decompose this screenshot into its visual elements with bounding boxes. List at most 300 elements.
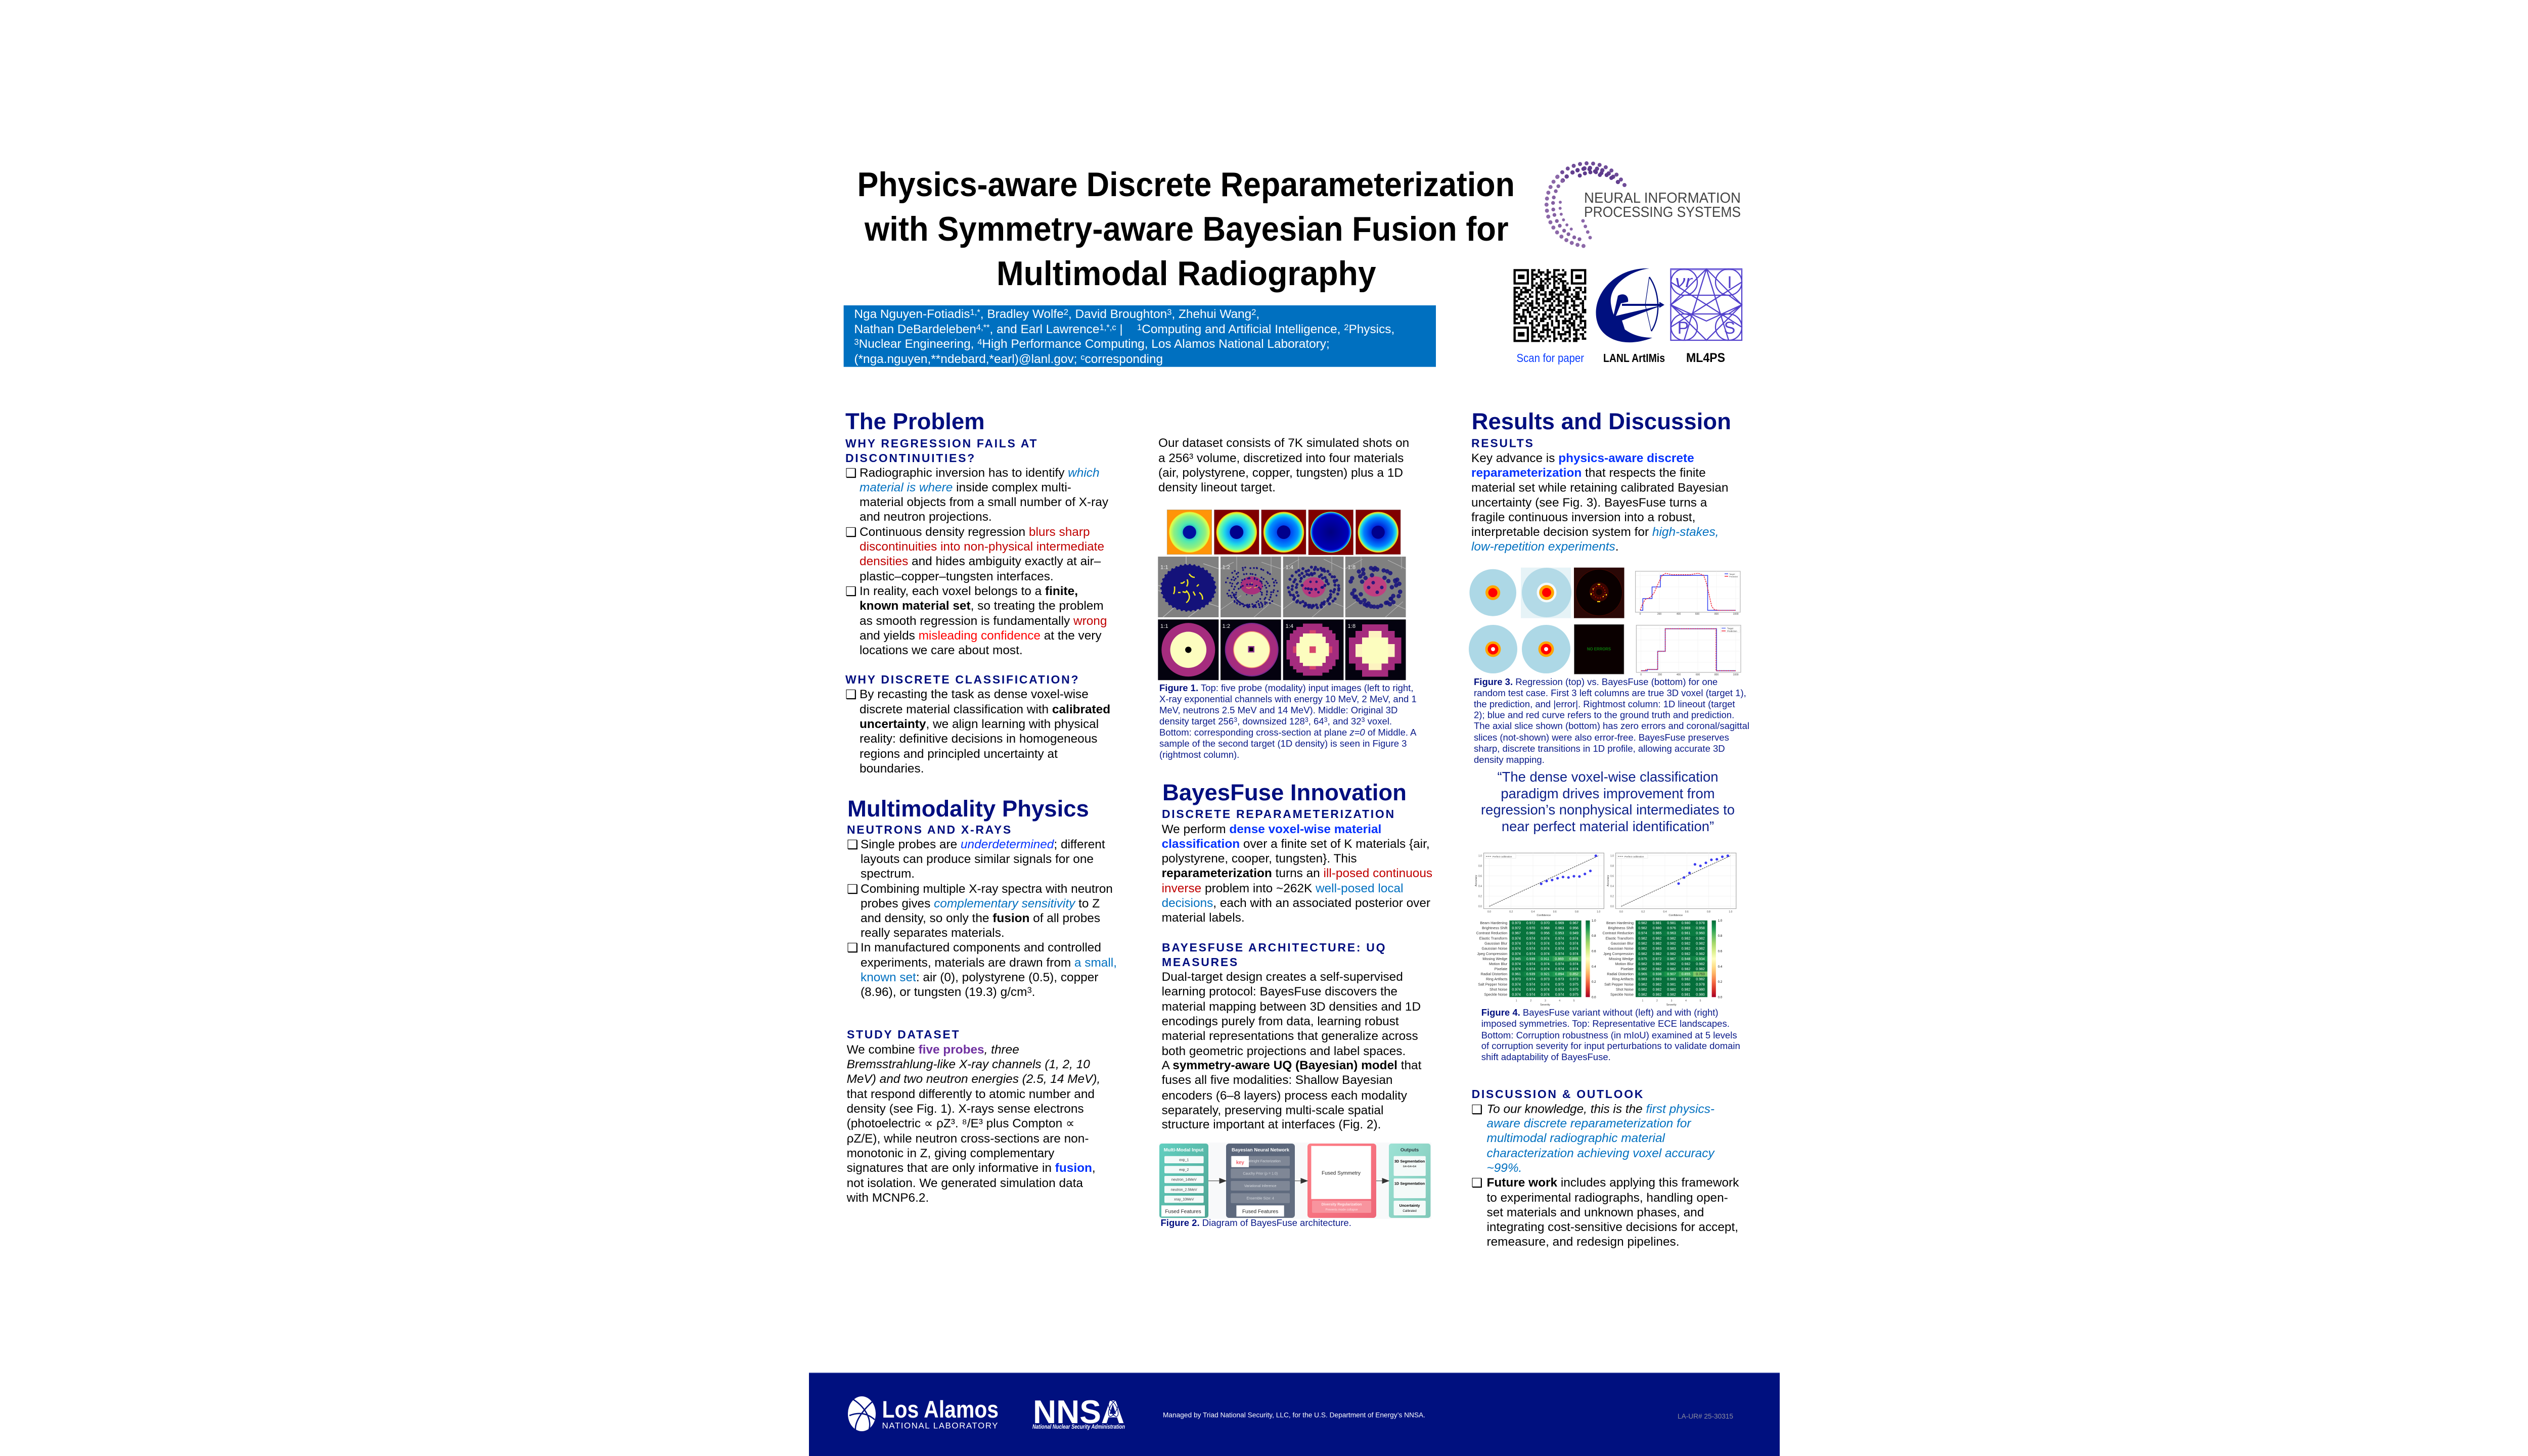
logo: ML4PS — [1671, 269, 1742, 340]
chart: calibration without symmetry: Perfect calibration — [1493, 855, 1512, 858]
heatmap: corruption robustness without symmetry: Elastic Transform — [1479, 936, 1507, 940]
heatmap: corruption robustness with symmetry: Pixelate — [1620, 967, 1634, 971]
figure 3 regression lineout: 800 — [1714, 613, 1719, 616]
heatmap: corruption robustness without symmetry: 0.974 0.974 0.974 0.974 0.974 — [1512, 952, 1578, 956]
text: discrete reparameterization: decisions, each with an associated posterior over — [1162, 896, 1430, 910]
figure 1 caption — [1159, 682, 1417, 760]
chart: calibration with symmetry: 1.0 — [1610, 854, 1614, 857]
block: multi-modal input — [1159, 1144, 1208, 1218]
text: study dataset paragraph — [846, 1043, 1100, 1205]
heatmap: corruption robustness without symmetry: 0.0 — [1592, 996, 1596, 999]
arrow: symmetry to outputs — [1376, 1178, 1389, 1184]
heatmap: corruption robustness without symmetry: Gaussian Blur — [1484, 941, 1508, 945]
figure 3 regression lineout: 0 — [1640, 613, 1641, 616]
panel: BayesFuse Innovation — [1162, 780, 1432, 1131]
figure 1 bottom row: cross-sections: 1:2 — [1223, 623, 1230, 629]
author and affiliation banner: Nathan DeBardeleben4,**, and Earl Lawrence1,*,c | — [854, 323, 1123, 336]
figure 1 middle row: 3D density targets: 1:2 — [1223, 565, 1230, 571]
figure 3 BayesFuse lineout: 1000 — [1733, 673, 1739, 676]
bullets: regression problems: Continuous density regression blurs sharp — [860, 525, 1090, 539]
chart: calibration without symmetry: Accuracy — [1475, 875, 1478, 886]
heatmap: corruption robustness with symmetry: 4 — [1685, 999, 1687, 1003]
chart: calibration with symmetry: 0.2 — [1641, 911, 1645, 914]
bullets: neutrons and x-rays: Single probes are underdetermined; different — [861, 838, 1105, 851]
text: study dataset paragraph: density (see Fig. 1). X-rays sense electrons — [847, 1102, 1084, 1116]
bullets: discrete classification: discrete material classification with calibrated — [860, 703, 1110, 716]
figure 1: probes and density targets — [1158, 510, 1417, 760]
heatmap: corruption robustness without symmetry: 1 — [1516, 999, 1517, 1003]
heatmap: corruption robustness without symmetry: Motion Blur — [1489, 962, 1508, 966]
bullets: regression problems: known material set, so treating the problem — [860, 599, 1104, 613]
logo captions: LANL ArtIMis — [1603, 351, 1665, 365]
subheading: why discrete classification: WHY DISCRETE CLASSIFICATION? — [845, 673, 1079, 686]
chart: calibration without symmetry: 1.0 — [1478, 854, 1482, 857]
text: study dataset paragraph: with MCNP6.2. — [846, 1191, 929, 1205]
bullets: discrete classification — [845, 687, 1110, 776]
bullets: neutrons and x-rays: known set: air (0), polystyrene (0.5), copper — [861, 971, 1098, 984]
bullets: neutrons and x-rays: and density, so only the fusion of all probes — [861, 912, 1100, 925]
text: results paragraph: fragile continuous inversion into a robust, — [1471, 511, 1695, 524]
figure 4 caption: of corruption severity for input perturbations to validate domain — [1481, 1040, 1740, 1051]
bullets: neutrons and x-rays: experiments, materials are drawn from a small, — [861, 956, 1117, 970]
bullets: regression problems: densities and hides ambiguity exactly at air– — [860, 555, 1101, 568]
bullets: discussion and outlook: ❑ — [1471, 1102, 1482, 1117]
figure 3 BayesFuse lineout: Prediction — [1727, 630, 1737, 632]
figure 3 regression lineout: Predicted — [1729, 575, 1738, 578]
logo: NNSA: NNSA — [1033, 1393, 1124, 1430]
chart: calibration without symmetry: 1.0 — [1597, 911, 1600, 914]
bullets: discrete classification: uncertainty, we align learning with physical — [860, 717, 1099, 731]
figure 1 caption: MeV, neutrons 2.5 MeV and 14 MeV). Middle: Original 3D — [1159, 705, 1397, 715]
chart: calibration with symmetry: 1.0 — [1729, 911, 1732, 914]
bullets: discussion and outlook — [1471, 1102, 1739, 1249]
text: discrete reparameterization: inverse problem into ~262K well-posed local — [1162, 882, 1404, 895]
figure 3 BayesFuse lineout: Target — [1727, 627, 1734, 630]
text: BayesFuse architecture: encoders (6–8 layers) process each modality — [1162, 1089, 1408, 1103]
bullets: regression problems: locations we care about most. — [860, 644, 1023, 657]
figure 3: regression vs BayesFuse — [1469, 568, 1749, 765]
author and affiliation banner — [844, 305, 1436, 367]
chart: calibration without symmetry — [1475, 853, 1604, 917]
text: discrete reparameterization: material labels. — [1162, 911, 1245, 925]
figure 3 regression prediction — [1521, 568, 1571, 618]
arrow: input to network — [1208, 1178, 1226, 1184]
bullets: neutrons and x-rays — [847, 837, 1117, 999]
figure 3 BayesFuse lineout: 400 — [1677, 673, 1681, 676]
figure 3 BayesFuse lineout: 600 — [1696, 673, 1700, 676]
block: multi-modal input: Fused Features — [1165, 1209, 1201, 1214]
figure 2 caption: Figure 2. Diagram of BayesFuse architecture. — [1161, 1217, 1351, 1228]
block: fused symmetry: Diversity Regularization — [1322, 1203, 1362, 1206]
bullets: regression problems: Radiographic inversion has to identify which — [860, 466, 1100, 480]
heatmap: corruption robustness without symmetry: 2 — [1530, 999, 1531, 1003]
bullets: discussion and outlook: ~99%. — [1486, 1161, 1522, 1175]
heatmap: corruption robustness with symmetry: 0.982 0.982 0.982 0.982 0.982 — [1638, 963, 1705, 966]
text: dataset summary — [1158, 436, 1409, 494]
bullets: regression problems: and yields misleading confidence at the very — [860, 629, 1102, 643]
heatmap: corruption robustness with symmetry: Salt Pepper Noise — [1604, 982, 1634, 987]
heatmap: corruption robustness with symmetry: 0.982 0.982 0.982 0.982 0.980 — [1638, 988, 1705, 992]
panel: Discussion and Outlook — [1471, 1087, 1739, 1249]
heatmap: corruption robustness with symmetry — [1602, 919, 1723, 1007]
heatmap: corruption robustness with symmetry: Jpeg Compression — [1603, 951, 1634, 956]
heatmap: corruption robustness with symmetry: 1 — [1642, 999, 1644, 1003]
chart: calibration with symmetry: 0.6 — [1685, 911, 1689, 914]
text: results paragraph: uncertainty (see Fig. 3). BayesFuse turns a — [1471, 496, 1707, 510]
bullets: regression problems: discontinuities into non-physical intermediate — [860, 540, 1104, 554]
heatmap: corruption robustness without symmetry: 0.974 0.974 0.974 0.974 0.974 — [1512, 937, 1578, 940]
chart: calibration without symmetry: 0.6 — [1478, 875, 1482, 878]
block: multi-modal input: neutron_14MeV — [1171, 1178, 1197, 1182]
heatmap: corruption robustness with symmetry: 0.975 0.972 0.967 0.948 0.934 — [1638, 958, 1705, 961]
heatmap: corruption robustness with symmetry: 5 — [1700, 999, 1701, 1003]
figure 1 bottom row: cross-sections — [1158, 619, 1406, 680]
text: BayesFuse architecture: A symmetry-aware UQ (Bayesian) model that — [1162, 1059, 1422, 1072]
subheading: why regression fails: WHY REGRESSION FAILS AT — [845, 437, 1038, 450]
callout: pull quote: near perfect material identification” — [1502, 818, 1714, 834]
text: BayesFuse architecture: Dual-target design creates a self-supervised — [1162, 970, 1403, 984]
title: Multimodal Radiography — [997, 254, 1376, 293]
text: discrete reparameterization: reparameterization turns an ill-posed continuous — [1162, 867, 1432, 880]
text: results paragraph: low-repetition experiments. — [1471, 540, 1618, 554]
heatmap: corruption robustness without symmetry: Radial Distortion — [1481, 972, 1507, 976]
chart: calibration with symmetry: 0.2 — [1610, 895, 1614, 898]
chart: calibration without symmetry: 0.8 — [1478, 864, 1482, 868]
block: fused symmetry: Fused Symmetry — [1322, 1171, 1361, 1176]
heatmap: corruption robustness with symmetry: 3 — [1671, 999, 1673, 1003]
logo: Los Alamos National Laboratory: NATIONAL LABORATORY — [882, 1421, 998, 1431]
block: outputs: Uncertainty — [1400, 1203, 1420, 1208]
bullets: neutrons and x-rays: ❑ — [847, 940, 858, 955]
logo: ML4PS: S — [1724, 318, 1735, 338]
chart: calibration without symmetry: 0.4 — [1531, 911, 1535, 914]
logo captions: ML4PS — [1686, 351, 1725, 365]
chart: calibration without symmetry: 0.4 — [1478, 885, 1482, 888]
text: document number: LA-UR# 25-30315 — [1678, 1412, 1733, 1420]
figure 3 caption: sharp, discrete transitions in 1D profile, allowing accurate 3D — [1474, 743, 1725, 754]
bullets: regression problems: material objects from a small number of X-ray — [860, 495, 1109, 509]
text: study dataset paragraph: We combine five probes, three — [847, 1043, 1019, 1057]
subheading: study dataset: STUDY DATASET — [847, 1028, 960, 1041]
heatmap: corruption robustness without symmetry: 0.945 0.939 0.911 0.869 0.855 — [1512, 958, 1578, 961]
bullets: neutrons and x-rays: Combining multiple X-ray spectra with neutron — [861, 882, 1113, 896]
QR code: scan for paper — [1514, 270, 1586, 341]
bullets: neutrons and x-rays: probes gives complementary sensitivity to Z — [861, 897, 1100, 911]
chart: calibration with symmetry: 0.0 — [1610, 905, 1614, 908]
bullets: regression problems: ❑ — [845, 525, 856, 539]
figure 3 BayesFuse lineout: 200 — [1658, 673, 1662, 676]
figure 3 BayesFuse error map: NO ERRORS — [1587, 647, 1611, 651]
text: results paragraph: reparameterization that respects the finite — [1471, 466, 1706, 480]
figure 3 regression lineout: 400 — [1677, 613, 1681, 616]
figure 1 caption: (rightmost column). — [1159, 749, 1239, 760]
title: with Symmetry-aware Bayesian Fusion for — [864, 210, 1509, 248]
text: BayesFuse architecture: material representations that generalize across — [1162, 1029, 1418, 1043]
heatmap: corruption robustness without symmetry: 0.974 0.974 0.974 0.974 0.975 — [1512, 993, 1578, 997]
block: Bayesian neural network — [1226, 1144, 1295, 1218]
heatmap: corruption robustness with symmetry: Gaussian Blur — [1611, 941, 1634, 945]
subheading: neutrons and x-rays: NEUTRONS AND X-RAYS — [847, 823, 1012, 836]
figure 3 BayesFuse prediction — [1522, 625, 1570, 673]
heatmap: corruption robustness without symmetry: Salt Pepper Noise — [1478, 982, 1507, 987]
footer bar — [809, 1373, 1780, 1456]
figure 4 caption — [1481, 1007, 1740, 1062]
heading: Results and Discussion: Results and Discussion — [1472, 408, 1731, 434]
figure 1 caption: X-ray exponential channels with energy 10 MeV, 2 MeV, and 1 — [1159, 694, 1417, 704]
text: BayesFuse architecture: separately, preserving multi-scale spatial — [1162, 1104, 1383, 1117]
bullets: discussion and outlook: characterization achieving voxel accuracy — [1486, 1147, 1715, 1160]
bullets: regression problems: plastic–copper–tungsten interfaces. — [860, 570, 1054, 583]
chart: calibration without symmetry: 0.0 — [1478, 905, 1482, 908]
heatmap: corruption robustness with symmetry: Shot Noise — [1616, 987, 1634, 992]
figure 1 middle row: 3D density targets: 1:1 — [1160, 565, 1168, 571]
bullets: regression problems: and neutron projections. — [860, 510, 992, 524]
figure 1 middle row: 3D density targets — [1158, 557, 1406, 617]
block: outputs — [1389, 1144, 1430, 1218]
chart: calibration without symmetry: 0.0 — [1487, 911, 1491, 914]
chart: calibration without symmetry: 0.2 — [1478, 895, 1482, 898]
heatmap: corruption robustness without symmetry: 0.973 0.972 0.970 0.969 0.967 — [1512, 922, 1578, 925]
text: results paragraph: material set while retaining calibrated Bayesian — [1471, 481, 1728, 494]
heatmap: corruption robustness with symmetry: 0.982 0.982 0.982 0.982 0.982 — [1638, 952, 1705, 956]
figure 3 regression lineout: Target — [1729, 573, 1735, 575]
heatmap: corruption robustness with symmetry: 0.982 0.982 0.982 0.982 0.982 — [1638, 937, 1705, 940]
text: BayesFuse architecture: encodings purely from data, learning robust — [1162, 1015, 1399, 1028]
figure 3 regression lineout: 200 — [1657, 613, 1661, 616]
text: results paragraph: Key advance is physics-aware discrete — [1471, 451, 1694, 465]
subheading: BayesFuse architecture: BAYESFUSE ARCHITECTURE: UQ — [1162, 941, 1386, 954]
block: fused symmetry: Prevents mode collapse — [1325, 1208, 1358, 1211]
bullets: regression problems: ❑ — [845, 466, 856, 480]
heatmap: corruption robustness with symmetry: Elastic Transform — [1605, 936, 1634, 940]
figure 3 caption — [1474, 676, 1749, 765]
bullets: discussion and outlook: multimodal radiographic material — [1486, 1131, 1665, 1145]
figure 4 caption: shift adaptability of BayesFuse. — [1481, 1052, 1611, 1062]
figure 1 bottom row: cross-sections: 1:1 — [1160, 623, 1168, 629]
block: multi-modal input: exp_2 — [1179, 1168, 1189, 1172]
arrow: network to symmetry — [1295, 1178, 1307, 1184]
chart: calibration without symmetry: 0.6 — [1553, 911, 1557, 914]
callout: pull quote: “The dense voxel-wise classification — [1498, 769, 1718, 785]
bullets: discrete classification: boundaries. — [860, 762, 924, 776]
figure 3 caption: random test case. First 3 left columns are true 3D voxel (target 1), — [1474, 688, 1746, 698]
chart: calibration with symmetry: 0.0 — [1619, 911, 1623, 914]
heatmap: corruption robustness without symmetry: 0.974 0.974 0.974 0.974 0.974 — [1512, 968, 1578, 971]
chart: calibration with symmetry: 0.4 — [1610, 885, 1614, 888]
subheading: discussion and outlook: DISCUSSION & OUTLOOK — [1472, 1087, 1644, 1101]
figure 1 middle row: 3D density targets: 1:8 — [1348, 565, 1356, 571]
logo: NeurIPS: NEURAL INFORMATION — [1584, 190, 1741, 206]
heatmap: corruption robustness without symmetry: 0.973 0.974 0.973 0.973 0.973 — [1512, 978, 1578, 981]
figure 3 caption: The axial slice shown (bottom) has zero errors and coronal/sagittal — [1474, 720, 1749, 731]
chart: calibration with symmetry — [1607, 853, 1736, 917]
block: Bayesian neural network: Weight Factorization — [1248, 1160, 1281, 1163]
bullets: neutrons and x-rays: (8.96), or tungsten (19.3) g/cm3. — [861, 985, 1035, 999]
bullets: discussion and outlook: Future work includes applying this framework — [1486, 1176, 1739, 1190]
heatmap: corruption robustness with symmetry: Gaussian Noise — [1608, 946, 1634, 950]
heatmap: corruption robustness without symmetry: Gaussian Noise — [1482, 946, 1507, 950]
heatmap: corruption robustness with symmetry: 1.0 — [1718, 919, 1723, 923]
bullets: neutrons and x-rays: really separates materials. — [861, 926, 1005, 940]
logo: ML4PS: I — [1727, 273, 1732, 292]
figure 1 bottom row: cross-sections: 1:8 — [1348, 623, 1356, 629]
heatmap: corruption robustness without symmetry: 0.4 — [1592, 965, 1596, 969]
block: Bayesian neural network: Bayesian Neural Network — [1232, 1148, 1290, 1153]
text: results paragraph: interpretable decision system for high-stakes, — [1471, 525, 1719, 539]
text: discrete reparameterization: polystyrene, cooper, tungsten}. This — [1162, 852, 1357, 866]
text: study dataset paragraph: that respond differently to atomic number and — [847, 1087, 1095, 1101]
bullets: neutrons and x-rays: spectrum. — [861, 867, 915, 881]
text: dataset summary: a 256³ volume, discretized into four materials — [1158, 451, 1404, 465]
heatmap: corruption robustness without symmetry: 0.8 — [1592, 934, 1596, 938]
text: BayesFuse architecture: material mapping between 3D densities and 1D — [1162, 1000, 1421, 1014]
figure 1 caption: sample of the second target (1D density) is seen in Figure 3 — [1159, 738, 1407, 749]
heatmap: corruption robustness with symmetry: Radial Distortion — [1607, 972, 1634, 976]
block: outputs: 1D Segmentation — [1394, 1181, 1425, 1186]
heatmap: corruption robustness with symmetry: 0.965 0.938 0.907 0.855 0.763 — [1638, 973, 1705, 976]
chart: calibration without symmetry: 0.2 — [1509, 911, 1513, 914]
heatmap: corruption robustness without symmetry: Speckle Noise — [1484, 992, 1507, 997]
heatmap: corruption robustness without symmetry: Severity — [1540, 1004, 1550, 1007]
chart: calibration with symmetry: 0.6 — [1610, 875, 1614, 878]
bullets: neutrons and x-rays: layouts can produce similar signals for one — [861, 852, 1094, 866]
figure 4 caption: Figure 4. BayesFuse variant without (left) and with (right) — [1481, 1007, 1719, 1018]
subheading: discrete reparameterization: DISCRETE REPARAMETERIZATION — [1162, 807, 1395, 821]
heatmap: corruption robustness with symmetry: 0.982 0.980 0.976 0.969 0.958 — [1638, 927, 1705, 930]
heatmap: corruption robustness with symmetry: Missing Wedge — [1609, 957, 1634, 961]
block: multi-modal input: xray_10MeV — [1174, 1198, 1194, 1202]
logo: NNSA: National Nuclear Security Administration — [1032, 1424, 1125, 1430]
heatmap: corruption robustness without symmetry: 0.2 — [1592, 980, 1596, 984]
logo: Los Alamos National Laboratory: Los Alamos — [882, 1396, 999, 1423]
figure 1 caption: density target 2563, downsized 1283, 643, and 323 voxel. — [1159, 716, 1392, 726]
block: Bayesian neural network: key — [1236, 1160, 1244, 1166]
text: management statement: Managed by Triad National Security, LLC, for the U.S. Department of Energy’s NNSA. — [1163, 1412, 1425, 1419]
heatmap: corruption robustness with symmetry: 0.0 — [1718, 996, 1723, 999]
heatmap: corruption robustness without symmetry: 4 — [1559, 999, 1560, 1003]
heatmap: corruption robustness with symmetry: 0.2 — [1718, 980, 1723, 984]
figure 4 caption: Bottom: Corruption robustness (in mIoU) examined at 5 levels — [1481, 1030, 1737, 1040]
text: BayesFuse architecture: structure important at interfaces (Fig. 2). — [1162, 1118, 1381, 1131]
heatmap: corruption robustness without symmetry: Jpeg Compression — [1477, 951, 1507, 956]
block: outputs: Outputs — [1401, 1148, 1419, 1153]
heatmap: corruption robustness without symmetry: Pixelate — [1495, 967, 1507, 971]
text: study dataset paragraph: MeV) and two neutron energies (2.5, 14 MeV), — [847, 1072, 1100, 1086]
text: dataset summary: density lineout target. — [1158, 481, 1276, 494]
panel: Multimodality Physics — [847, 796, 1117, 999]
block: Bayesian neural network: Fused Features — [1242, 1209, 1278, 1214]
heatmap: corruption robustness without symmetry: 5 — [1573, 999, 1575, 1003]
heatmap: corruption robustness without symmetry: 0.974 0.974 0.974 0.974 0.974 — [1512, 963, 1578, 966]
bullets: regression problems: ❑ — [845, 584, 856, 599]
text: discrete reparameterization — [1162, 823, 1432, 925]
logo captions — [1517, 351, 1725, 365]
chart: calibration with symmetry: Accuracy — [1607, 875, 1610, 886]
title — [857, 165, 1515, 293]
text: study dataset paragraph: monotonic in Z, giving complementary — [847, 1147, 1055, 1160]
heatmap: corruption robustness with symmetry: 0.6 — [1718, 949, 1723, 953]
figure 2: BayesFuse architecture diagram — [1159, 1143, 1431, 1219]
logo: ML4PS: νr — [1675, 272, 1693, 291]
subheading: BayesFuse architecture: MEASURES — [1162, 956, 1239, 969]
bullets: discussion and outlook: aware discrete reparameterization for — [1486, 1117, 1691, 1130]
bullets: discussion and outlook: remeasure, and redesign pipelines. — [1486, 1235, 1680, 1249]
bullets: regression problems: In reality, each voxel belongs to a finite, — [860, 584, 1078, 598]
heatmap: corruption robustness without symmetry: 3 — [1545, 999, 1546, 1003]
callout: pull quote: regression’s nonphysical intermediates to — [1481, 802, 1735, 817]
heatmap: corruption robustness without symmetry: 1.0 — [1592, 919, 1596, 923]
title: Physics-aware Discrete Reparameterization — [857, 165, 1515, 204]
block: multi-modal input: exp_1 — [1179, 1159, 1189, 1162]
text: discrete reparameterization: classification over a finite set of K materials {air, — [1162, 837, 1430, 851]
bullets: regression problems: as smooth regression is fundamentally wrong — [860, 614, 1107, 628]
figure 3 BayesFuse voxel target — [1469, 625, 1517, 673]
logo: ML4PS: P — [1678, 318, 1689, 338]
bullets: discussion and outlook: set materials and unknown phases, and — [1486, 1206, 1704, 1219]
chart: calibration with symmetry: Perfect calibration — [1624, 855, 1644, 858]
callout: pull quote: paradigm drives improvement from — [1501, 786, 1715, 801]
bullets: discrete classification: By recasting the task as dense voxel-wise — [860, 688, 1089, 701]
heatmap: corruption robustness with symmetry: Severity — [1666, 1004, 1677, 1007]
bullets: discussion and outlook: ❑ — [1471, 1175, 1482, 1190]
figure 1 top row: five probe images — [1167, 510, 1401, 555]
chart: calibration with symmetry: Confidence — [1668, 914, 1683, 917]
figure 3 caption: the prediction, and |error|. Rightmost column: 1D lineout (target — [1474, 699, 1735, 709]
logo: NeurIPS — [1547, 163, 1741, 246]
figure 3 regression error map — [1574, 568, 1624, 618]
block: Bayesian neural network: Ensemble Size: 4 — [1246, 1197, 1274, 1200]
heatmap: corruption robustness with symmetry: Ring Artifacts — [1612, 977, 1634, 981]
figure 4: calibration and corruption robustness — [1475, 853, 1740, 1062]
heatmap: corruption robustness without symmetry: 0.972 0.970 0.968 0.963 0.956 — [1512, 927, 1578, 930]
bullets: regression problems — [845, 466, 1109, 657]
block: outputs: 64×64×64 — [1403, 1165, 1417, 1168]
figure 3 BayesFuse lineout — [1636, 625, 1741, 676]
author and affiliation banner: (*nga.nguyen,**ndebard,*earl)@lanl.gov; ccorresponding — [854, 352, 1163, 366]
heatmap: corruption robustness without symmetry: 0.974 0.974 0.974 0.974 0.974 — [1512, 947, 1578, 950]
heatmap: corruption robustness with symmetry: 0.982 0.982 0.982 0.981 0.980 — [1638, 993, 1705, 997]
heatmap: corruption robustness with symmetry: 0.982 0.981 0.981 0.980 0.978 — [1638, 922, 1705, 925]
block: Bayesian neural network: Cauchy Prior (ρ = 1.0) — [1243, 1172, 1278, 1176]
text: dataset summary: (air, polystyrene, copper, tungsten) plus a 1D — [1158, 466, 1403, 480]
text: results paragraph — [1471, 451, 1728, 554]
heatmap: corruption robustness without symmetry: Contrast Reduction — [1476, 931, 1507, 935]
figure 3 regression lineout — [1636, 571, 1740, 616]
heatmap: corruption robustness with symmetry: Brightness Shift — [1608, 926, 1634, 930]
heatmap: corruption robustness without symmetry: 0.974 0.974 0.974 0.974 0.974 — [1512, 942, 1578, 945]
figure 1 caption: Figure 1. Top: five probe (modality) input images (left to right, — [1159, 682, 1413, 693]
heatmap: corruption robustness without symmetry: Shot Noise — [1489, 987, 1507, 992]
text: study dataset paragraph: signatures that are only informative in fusion, — [847, 1161, 1096, 1175]
text: study dataset paragraph: ρZ/E), while neutron cross-sections are non- — [847, 1132, 1089, 1146]
panel: Results and Discussion — [1471, 408, 1731, 554]
figure 3 BayesFuse lineout: 800 — [1714, 673, 1719, 676]
subheading: why regression fails: DISCONTINUITIES? — [845, 451, 976, 465]
bullets: discussion and outlook: To our knowledge, this is the first physics- — [1486, 1102, 1714, 1116]
heading: BayesFuse Innovation: BayesFuse Innovation — [1162, 780, 1407, 805]
heatmap: corruption robustness without symmetry: 0.974 0.974 0.974 0.974 0.975 — [1512, 988, 1578, 992]
heatmap: corruption robustness with symmetry: 0.982 0.982 0.981 0.980 0.978 — [1638, 983, 1705, 987]
bullets: discussion and outlook: integrating cost-sensitive decisions for accept, — [1486, 1220, 1738, 1234]
block: multi-modal input: Multi-Modal Input — [1164, 1148, 1204, 1153]
author and affiliation banner: Computing and Artificial Intelligence, 2Physics, — [1142, 323, 1394, 336]
block: outputs: 3D Segmentation — [1394, 1159, 1425, 1164]
bullets: regression problems: material is where inside complex multi- — [860, 481, 1071, 494]
chart: calibration with symmetry: 0.8 — [1610, 864, 1614, 868]
bullets: neutrons and x-rays: In manufactured components and controlled — [861, 941, 1101, 954]
heatmap: corruption robustness without symmetry: Missing Wedge — [1482, 957, 1507, 961]
block: fused symmetry — [1307, 1144, 1376, 1218]
